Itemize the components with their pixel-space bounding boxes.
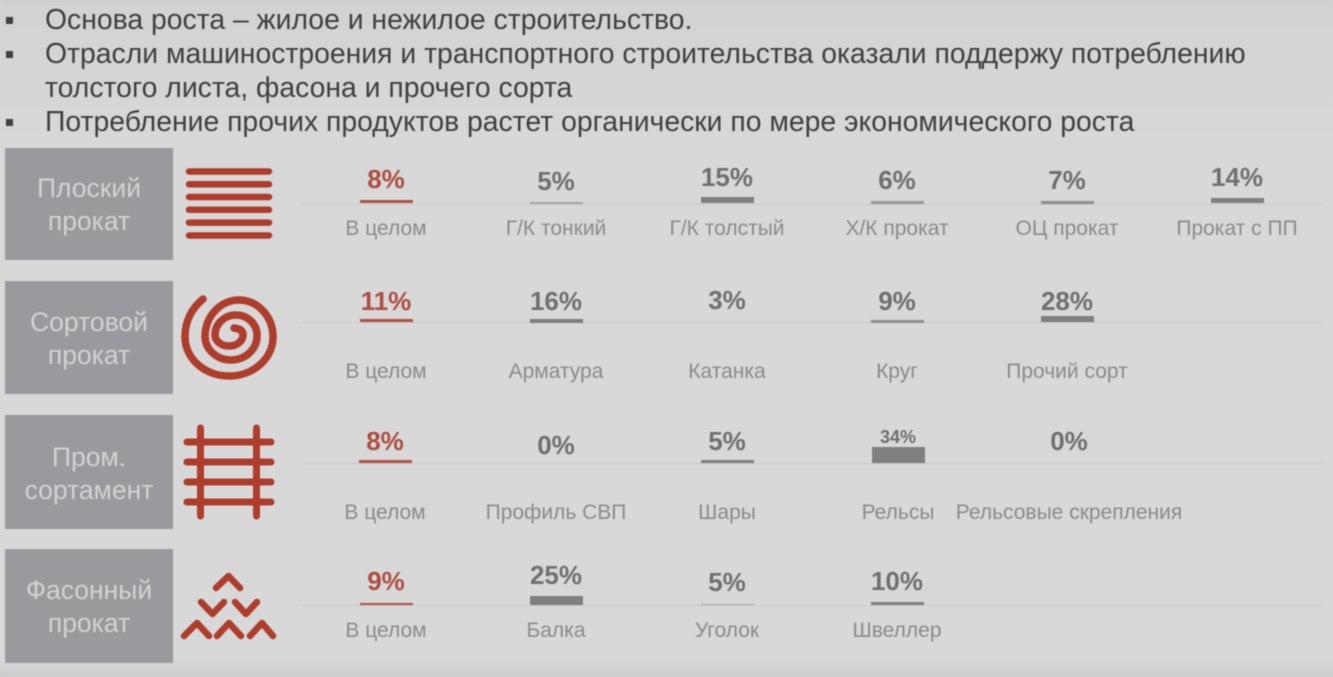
- metric: balls 5%: [698, 426, 756, 524]
- metric: overall 9%: 9%: [367, 566, 405, 596]
- metric: rebar 16%: Арматура: [509, 360, 603, 383]
- bullet marker 3: [6, 119, 13, 126]
- bullet marker 1: [6, 17, 13, 24]
- metric: thick hot-rolled 15%: [669, 162, 785, 240]
- icon: stacked angle profiles: [180, 572, 277, 640]
- metric: thin hot-rolled 5%: [506, 166, 606, 240]
- metric: angle 5%: 5%: [708, 567, 746, 597]
- bullet marker 2: [6, 51, 13, 58]
- metric: thin hot-rolled 5%: Г/К тонкий: [506, 217, 606, 240]
- metric: thick hot-rolled 15%: 15%: [701, 162, 753, 192]
- metric: cold-rolled 6%: 6%: [878, 165, 916, 195]
- metric: coated 14%: [1176, 162, 1298, 240]
- metric: other long 28%: [1006, 286, 1128, 383]
- icon: rail track: [182, 424, 276, 520]
- metric: angle 5%: [695, 567, 760, 642]
- metric: balls 5%: Шары: [698, 501, 756, 524]
- metric: other long 28%: 28%: [1041, 286, 1093, 316]
- metric: sheet pile 0%: 0%: [537, 430, 575, 460]
- metric: coated 14%: 14%: [1211, 162, 1263, 192]
- category label: industrial range: [5, 415, 173, 529]
- metric: overall 9%: [345, 566, 427, 642]
- metric: galvanized 7%: [1016, 165, 1119, 240]
- metric: rail fasteners 0%: Рельсовые скрепления: [956, 501, 1182, 524]
- axis line: [302, 463, 1323, 464]
- metric: balls 5%: 5%: [708, 426, 746, 456]
- metric: overall 8%: [345, 164, 427, 240]
- metric: overall 8%: В целом: [344, 501, 426, 524]
- category label: industrial range: Пром.: [52, 442, 126, 472]
- metric: channel 10%: Швеллер: [852, 619, 942, 642]
- metric: galvanized 7%: 7%: [1048, 165, 1086, 195]
- metric: cold-rolled 6%: Х/К прокат: [845, 217, 949, 240]
- metric: round bar 9%: [870, 286, 924, 383]
- metric: overall 11%: В целом: [345, 360, 427, 383]
- category label: flat products: прокат: [48, 206, 130, 236]
- metric: wire rod 3%: 3%: [708, 285, 746, 315]
- bullet text 1: Основа роста – жилое и нежилое строительство.: [45, 4, 692, 36]
- category label: long products: Сортовой: [30, 307, 148, 337]
- metric: thick hot-rolled 15%: Г/К толстый: [669, 217, 785, 240]
- metric: overall 8%: В целом: [345, 217, 427, 240]
- metric: rails 34%: Рельсы: [862, 501, 934, 524]
- metric: overall 11%: [345, 286, 427, 383]
- panel: flat products row: [4, 148, 1322, 260]
- category label: long products: прокат: [48, 340, 130, 370]
- metric: overall 9%: В целом: [345, 619, 427, 642]
- bullet text 3: Потребление прочих продуктов растет органически по мере экономического роста: [45, 106, 1134, 138]
- metric: thin hot-rolled 5%: 5%: [537, 166, 575, 196]
- category label: flat products: Плоский: [37, 173, 141, 203]
- axis line: [302, 322, 1323, 323]
- axis line: [302, 204, 1323, 205]
- category label: flat products: [5, 148, 173, 260]
- metric: round bar 9%: 9%: [878, 286, 916, 316]
- panel: sections row: [4, 548, 1322, 664]
- category label: long products: [5, 281, 173, 394]
- metric: rebar 16%: [508, 286, 604, 383]
- metric: beam 25%: 25%: [530, 560, 582, 590]
- axis line: [302, 605, 1323, 606]
- metric: beam 25%: Балка: [526, 619, 586, 642]
- metric: channel 10%: [852, 566, 942, 642]
- panel: industrial range row: [4, 414, 1322, 530]
- metric: other long 28%: Прочий сорт: [1006, 360, 1128, 383]
- metric: beam 25%: [526, 560, 586, 642]
- icon: stacked sheets: [185, 168, 273, 240]
- metric: rails 34%: [862, 427, 934, 524]
- category label: sections: [5, 549, 173, 663]
- bullet list: heading text: [5, 4, 1246, 138]
- bullet text 2: Отрасли машиностроения и транспортного строительства оказали поддержу потреблению: [45, 38, 1246, 70]
- metric: angle 5%: Уголок: [695, 619, 759, 642]
- metric: rail fasteners 0%: [956, 426, 1182, 524]
- panel: long products row: [4, 280, 1322, 394]
- metric: galvanized 7%: ОЦ прокат: [1016, 217, 1118, 240]
- bullet text 2: [44, 38, 1246, 104]
- metric: rail fasteners 0%: 0%: [1050, 426, 1088, 456]
- metric: sheet pile 0%: [486, 430, 626, 524]
- category label: sections: прокат: [48, 608, 130, 638]
- category label: industrial range: сортамент: [25, 475, 153, 505]
- metric: wire rod 3%: Катанка: [688, 360, 766, 383]
- metric: overall 8%: 8%: [366, 426, 404, 456]
- icon: coil spiral: [180, 294, 278, 380]
- metric: sheet pile 0%: Профиль СВП: [486, 501, 626, 524]
- metric: wire rod 3%: [688, 285, 766, 383]
- metric: rails 34%: 34%: [880, 427, 916, 447]
- metric: channel 10%: 10%: [871, 566, 923, 596]
- metric: overall 8%: 8%: [367, 164, 405, 194]
- metric: rebar 16%: 16%: [530, 286, 582, 316]
- metric: coated 14%: Прокат с ПП: [1176, 217, 1298, 240]
- bullet text 2: толстого листа, фасона и прочего сорта: [45, 72, 572, 104]
- metric: round bar 9%: Круг: [876, 360, 918, 383]
- category label: sections: Фасонный: [26, 575, 152, 605]
- metric: cold-rolled 6%: [845, 165, 949, 240]
- metric: overall 11%: 11%: [361, 286, 411, 316]
- metric: overall 8%: [344, 426, 426, 524]
